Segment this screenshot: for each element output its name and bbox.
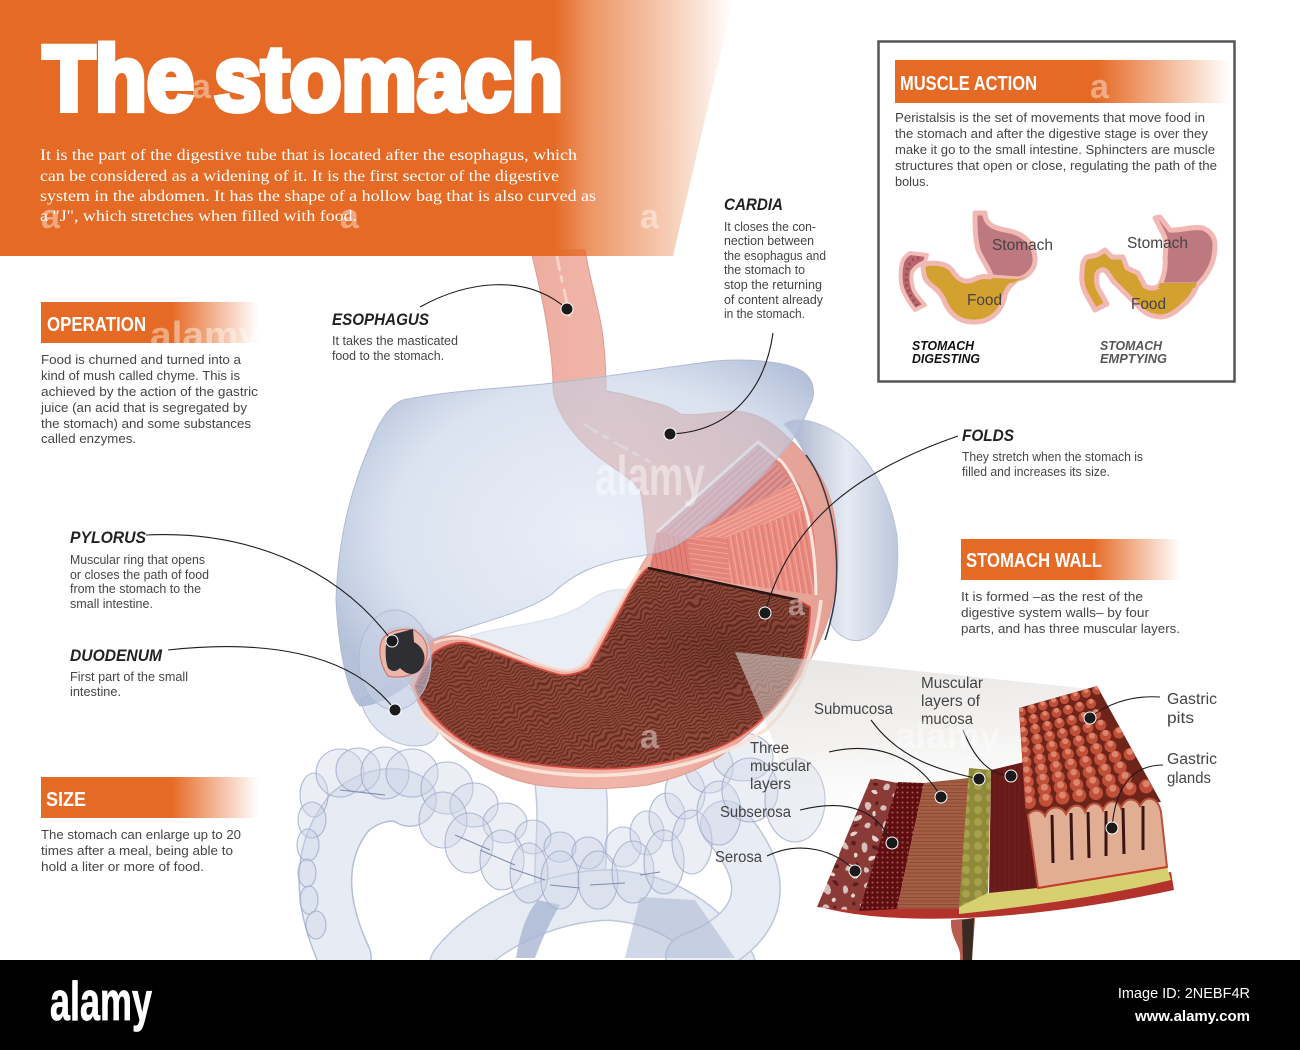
text: muscle action bbox=[895, 111, 1217, 189]
text: esophagus bbox=[332, 334, 458, 363]
illustration: stomach wall layers bbox=[810, 680, 1174, 960]
text: cardia: the stomach to bbox=[724, 263, 805, 277]
large lower tubes bbox=[325, 780, 756, 965]
text: pylorus: small intestine. bbox=[70, 597, 153, 611]
duodenum tube bbox=[900, 253, 927, 310]
text: stomach wall: It is formed –as the rest of the bbox=[961, 590, 1143, 604]
junction of fluid level bbox=[990, 276, 1028, 283]
stomach food part bbox=[923, 263, 1018, 322]
dark fold edge bbox=[648, 568, 798, 600]
pyloric cap bbox=[359, 610, 431, 710]
text: esophagus: It takes the masticated bbox=[332, 334, 458, 348]
text: operation: juice (an acid that is segregated by bbox=[40, 401, 248, 415]
watermarks: a bbox=[1090, 68, 1110, 106]
base band bbox=[817, 872, 1174, 919]
dark edge near spleen bbox=[806, 455, 837, 640]
wall detail labels: layers bbox=[750, 776, 791, 793]
callout lines and dots bbox=[146, 285, 1163, 877]
diagram: stomach emptying bbox=[1082, 217, 1215, 366]
label: cardia bbox=[724, 195, 826, 321]
text: size: The stomach can enlarge up to 20 bbox=[41, 828, 241, 842]
text: operation: kind of mush called chyme. This is bbox=[41, 369, 240, 383]
text: pylorus: from the stomach to the bbox=[70, 582, 201, 596]
label: esophagus: ESOPHAGUS bbox=[332, 310, 430, 329]
label: esophagus bbox=[332, 310, 458, 363]
label: cardia: CARDIA bbox=[724, 195, 783, 214]
pyloric hole bbox=[386, 629, 425, 674]
muscular layer bbox=[897, 778, 969, 909]
muscle band diagonal bbox=[687, 483, 803, 538]
wall detail labels: Gastric bbox=[1167, 691, 1217, 708]
text: size: hold a liter or more of food. bbox=[41, 860, 204, 874]
heading: stomach wall: STOMACH WALL bbox=[966, 550, 1102, 572]
wall detail labels: muscular bbox=[750, 758, 811, 775]
label: folds: FOLDS bbox=[962, 426, 1015, 445]
caption bbox=[912, 338, 980, 366]
website: www.alamy.com bbox=[1134, 1008, 1250, 1025]
perspective wedge to the wall detail bbox=[735, 652, 1100, 905]
caption: STOMACH bbox=[1100, 338, 1163, 353]
caption: STOMACH bbox=[912, 338, 975, 353]
text: muscle action: bolus. bbox=[895, 175, 929, 189]
text: cardia bbox=[724, 220, 826, 321]
duodenum ribs bbox=[906, 258, 919, 307]
watermarks: a bbox=[340, 198, 360, 236]
illustration: spleen bbox=[784, 420, 898, 641]
caption bbox=[1100, 338, 1167, 366]
esophagus highlights bbox=[557, 256, 650, 462]
text: cardia: of content already bbox=[724, 293, 824, 307]
text: duodenum bbox=[70, 670, 188, 699]
image id: Image ID: 2NEBF4R bbox=[1118, 986, 1250, 1002]
intro text: a "J", which stretches when filled with food. bbox=[40, 208, 357, 225]
logo: alamy bbox=[50, 970, 152, 1032]
colon fold lines bbox=[340, 790, 660, 888]
stomach outer wall bbox=[381, 250, 838, 789]
lesser curve highlight bbox=[434, 570, 640, 671]
title bbox=[43, 28, 563, 130]
label: duodenum: DUODENUM bbox=[70, 646, 163, 665]
text: folds bbox=[962, 450, 1143, 479]
wall detail labels: Muscular bbox=[921, 675, 983, 692]
wall detail labels: Three bbox=[750, 740, 789, 757]
wall detail labels: layers of bbox=[921, 693, 981, 710]
footer bar bbox=[0, 960, 1300, 1050]
text: pylorus: Muscular ring that opens bbox=[70, 553, 205, 567]
wall detail labels: mucosa bbox=[921, 711, 973, 728]
text: folds: filled and increases its size. bbox=[962, 465, 1110, 479]
watermarks: alamy bbox=[895, 715, 1000, 756]
label: pylorus: PYLORUS bbox=[70, 528, 147, 547]
caption: EMPTYING bbox=[1100, 351, 1167, 366]
muscle band left bbox=[687, 537, 730, 583]
intro text: system in the abdomen. It has the shape of a hollow bag that is also curved as bbox=[40, 188, 596, 205]
label food: Food bbox=[967, 292, 1002, 309]
mucosa folds bbox=[416, 569, 810, 768]
text: size bbox=[41, 828, 241, 874]
text: operation: achieved by the action of the gastric bbox=[41, 385, 258, 399]
serosa layer bbox=[817, 778, 898, 911]
gland slits bbox=[1052, 806, 1143, 863]
title: stomach bbox=[214, 28, 563, 130]
text: duodenum: intestine. bbox=[70, 685, 121, 699]
text: cardia: nection between bbox=[724, 234, 814, 248]
yellow band bbox=[959, 867, 1171, 914]
heading: size: SIZE bbox=[46, 789, 86, 811]
diagram: stomach digesting bbox=[900, 213, 1053, 366]
panel: size bbox=[41, 777, 258, 874]
text: size: times after a meal, being able to bbox=[41, 844, 233, 858]
illustration: pylorus opening bbox=[359, 610, 431, 710]
red line on yellow band bbox=[1038, 867, 1167, 888]
heading: muscle action: MUSCLE ACTION bbox=[900, 73, 1037, 95]
muscle band far left bbox=[650, 532, 692, 575]
wall detail labels: Submucosa bbox=[814, 701, 893, 718]
watermarks: a bbox=[192, 68, 212, 106]
intro text: can be considered as a widening of it. It is the first sector of the digestive bbox=[40, 168, 559, 185]
text: operation: Food is churned and turned into a bbox=[41, 353, 241, 367]
illustration: intestines bbox=[297, 733, 825, 965]
wall detail labels: glands bbox=[1167, 770, 1211, 787]
watermarks: alamy bbox=[595, 444, 705, 507]
pyloric ring bbox=[380, 629, 427, 677]
header banner bbox=[0, 0, 733, 256]
watermarks bbox=[41, 68, 1110, 756]
panel: operation bbox=[40, 302, 258, 446]
muscle band top bbox=[657, 442, 793, 538]
vessel dark side bbox=[962, 918, 974, 960]
stomach rose part bbox=[975, 213, 1035, 279]
wall detail labels: Serosa bbox=[715, 849, 762, 866]
illustration: esophagus and stomach bbox=[381, 250, 838, 789]
panel: stomach wall bbox=[961, 539, 1180, 636]
muscle band right bbox=[727, 510, 816, 595]
colon haustra bbox=[297, 733, 825, 939]
text: duodenum: First part of the small bbox=[70, 670, 188, 684]
wall detail labels: Gastric bbox=[1167, 751, 1217, 768]
illustration: duodenum lobe bbox=[360, 680, 439, 746]
muscular mucosa layer bbox=[989, 762, 1038, 893]
panel: muscle action bbox=[878, 42, 1234, 382]
text: operation bbox=[40, 353, 258, 446]
subserosa layer bbox=[859, 782, 924, 911]
text: muscle action: the stomach and after the digestive stage is over they bbox=[895, 127, 1209, 141]
text: cardia: the esophagus and bbox=[724, 249, 826, 263]
label: duodenum bbox=[70, 646, 188, 699]
text: folds: They stretch when the stomach is bbox=[962, 450, 1143, 464]
stomach muscle base bbox=[650, 442, 816, 595]
text: operation: the stomach) and some substances bbox=[41, 417, 251, 431]
text: stomach wall: digestive system walls– by four bbox=[961, 606, 1149, 620]
text: cardia: It closes the con- bbox=[724, 220, 816, 234]
label stomach: Stomach bbox=[1127, 235, 1188, 252]
text: cardia: stop the returning bbox=[724, 278, 822, 292]
illustration: transparent liver bbox=[336, 360, 813, 706]
stomach rose part bbox=[1155, 217, 1215, 285]
illustration: pancreas behind the stomach bbox=[470, 590, 640, 672]
text: cardia: in the stomach. bbox=[724, 307, 805, 321]
muscle edge bbox=[657, 442, 816, 595]
gastric pits surface bbox=[1019, 686, 1161, 818]
darker overlapping tube sections bbox=[625, 897, 735, 958]
outer rim highlight bbox=[420, 600, 821, 775]
text: pylorus bbox=[70, 553, 209, 611]
label food: Food bbox=[1131, 296, 1166, 313]
watermarks: a bbox=[640, 198, 660, 236]
food and duodenum bbox=[1082, 250, 1197, 317]
watermarks: alamy bbox=[150, 314, 260, 355]
heading: operation: OPERATION bbox=[47, 314, 146, 336]
gastric glands front bbox=[1028, 799, 1167, 888]
text: stomach wall bbox=[961, 590, 1180, 636]
fluid level patch bbox=[1158, 283, 1197, 288]
wall detail labels: pits bbox=[1167, 710, 1194, 727]
caption: DIGESTING bbox=[912, 351, 980, 366]
heading bar: muscle action bbox=[895, 60, 1230, 103]
intro text bbox=[40, 147, 596, 225]
text: pylorus: or closes the path of food bbox=[70, 568, 209, 582]
text: muscle action: structures that open or close, regulating the path of the bbox=[895, 159, 1217, 173]
stem vessel bbox=[951, 918, 975, 960]
mucosa shading bbox=[415, 568, 810, 769]
watermarks: a bbox=[640, 718, 660, 756]
label stomach: Stomach bbox=[992, 237, 1053, 254]
text: operation: called enzymes. bbox=[41, 432, 136, 446]
label: pylorus bbox=[70, 528, 209, 611]
watermarks: a bbox=[788, 589, 805, 622]
watermarks: a bbox=[41, 198, 61, 236]
wall detail labels: Subserosa bbox=[720, 804, 791, 821]
text: esophagus: food to the stomach. bbox=[332, 349, 444, 363]
text: muscle action: make it go to the small intestine. Sphincters are muscle bbox=[895, 143, 1215, 157]
title: The bbox=[43, 28, 194, 130]
label: folds bbox=[962, 426, 1143, 479]
text: muscle action: Peristalsis is the set of movements that move food in bbox=[895, 111, 1205, 125]
wall detail labels bbox=[715, 675, 1217, 866]
intro text: It is the part of the digestive tube that is located after the esophagus, which bbox=[40, 147, 577, 164]
submucosa layer bbox=[959, 768, 991, 907]
text: stomach wall: parts, and has three muscular layers. bbox=[961, 622, 1180, 636]
